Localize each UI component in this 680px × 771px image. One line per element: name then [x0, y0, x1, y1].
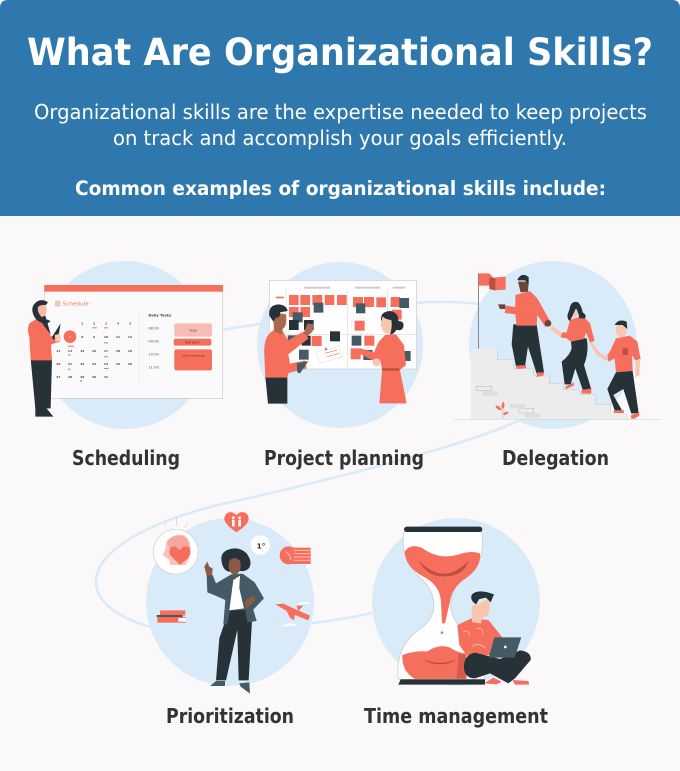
illustration: scheduling: 5 [129, 322, 131, 326]
icon: books [157, 610, 186, 623]
man right [595, 321, 641, 419]
illustration: scheduling: 18 [116, 349, 120, 353]
illustration: scheduling: Call John [185, 340, 200, 344]
icon: ticket [280, 546, 311, 564]
illustration: scheduling: 1 [81, 322, 83, 326]
icon: first place bubble [250, 535, 270, 555]
illustration: scheduling: Video conferencing [182, 355, 205, 358]
labels [72, 446, 609, 728]
illustration: scheduling: 13 [56, 349, 60, 353]
illustration: scheduling: 8 [81, 335, 83, 339]
icon: head with heart [153, 516, 198, 574]
illustration: scheduling: 24 [104, 362, 108, 366]
illustration: scheduling: 08:00 [148, 326, 160, 330]
plant [495, 402, 509, 418]
illustration: scheduling: 17 [104, 349, 108, 353]
illustration: scheduling: Schedule [63, 302, 89, 308]
illustration: scheduling: 21 [68, 362, 72, 366]
labels: Project planning [264, 446, 424, 470]
hourglass [398, 527, 485, 685]
icon: first place bubble: 1° [257, 541, 266, 550]
illustration: scheduling: 29 [80, 375, 84, 379]
header panel [0, 0, 680, 216]
illustration: time management [398, 527, 531, 685]
illustration: scheduling: 28 [68, 375, 72, 379]
man [264, 304, 313, 404]
flag [478, 273, 506, 349]
illustration: scheduling: 22 [80, 362, 84, 366]
title: What Are Organizational Skills? [27, 31, 653, 74]
illustration: scheduling: 31 [104, 375, 108, 379]
woman middle [550, 302, 601, 394]
background circles [41, 261, 637, 686]
illustration: scheduling: 10 [104, 335, 108, 339]
woman [359, 311, 407, 403]
illustration: scheduling: 23 [92, 362, 96, 366]
illustration: scheduling: 16 [92, 349, 96, 353]
man with laptop [457, 591, 531, 685]
labels: Scheduling [72, 446, 180, 470]
subheading: Common examples of organizational skills include: [75, 177, 606, 200]
connector line [96, 302, 527, 627]
illustration: scheduling: 25 [116, 362, 120, 366]
icon: airplane [275, 602, 312, 626]
illustration: project planning [264, 280, 417, 404]
labels: Time management [364, 704, 548, 728]
illustration: scheduling: 11:00 [148, 366, 160, 370]
intro text: Organizational skills are the expertise needed to keep projects [34, 100, 647, 124]
illustration: scheduling: 15 [80, 349, 84, 353]
icon: heart with people [224, 512, 249, 532]
illustration: scheduling: 11 [116, 335, 120, 339]
illustration: scheduling: 12 [128, 335, 132, 339]
intro text [34, 100, 647, 150]
illustration: scheduling: 10:00 [148, 353, 160, 357]
illustration: scheduling: 14 [68, 349, 72, 353]
illustration: scheduling: 30 [92, 375, 96, 379]
labels: Prioritization [166, 704, 294, 728]
illustration: scheduling: 20 [56, 362, 60, 366]
intro text: on track and accomplish your goals efficiently. [113, 126, 567, 150]
illustration: scheduling: 4 [117, 322, 119, 326]
illustration: scheduling: 3 [105, 322, 107, 326]
illustration: scheduling: 09:00 [148, 340, 160, 344]
illustration: scheduling: Daily Tasks [148, 314, 171, 318]
illustration: scheduling: 2 [93, 322, 95, 326]
illustration: scheduling: 19 [128, 349, 132, 353]
labels: Delegation [502, 446, 609, 470]
woman pointing [204, 548, 264, 694]
illustration: scheduling [28, 285, 223, 417]
illustration: scheduling: 26 [128, 362, 132, 366]
illustration: scheduling: 27 [56, 375, 60, 379]
man leading [498, 275, 551, 377]
illustration: scheduling: Yoga [189, 328, 197, 332]
illustration: delegation [454, 273, 661, 420]
illustration: scheduling: 9 [93, 335, 95, 339]
illustration: scheduling: 7 [69, 335, 71, 339]
woman with tablet [28, 300, 61, 417]
illustration: prioritization [153, 512, 312, 694]
